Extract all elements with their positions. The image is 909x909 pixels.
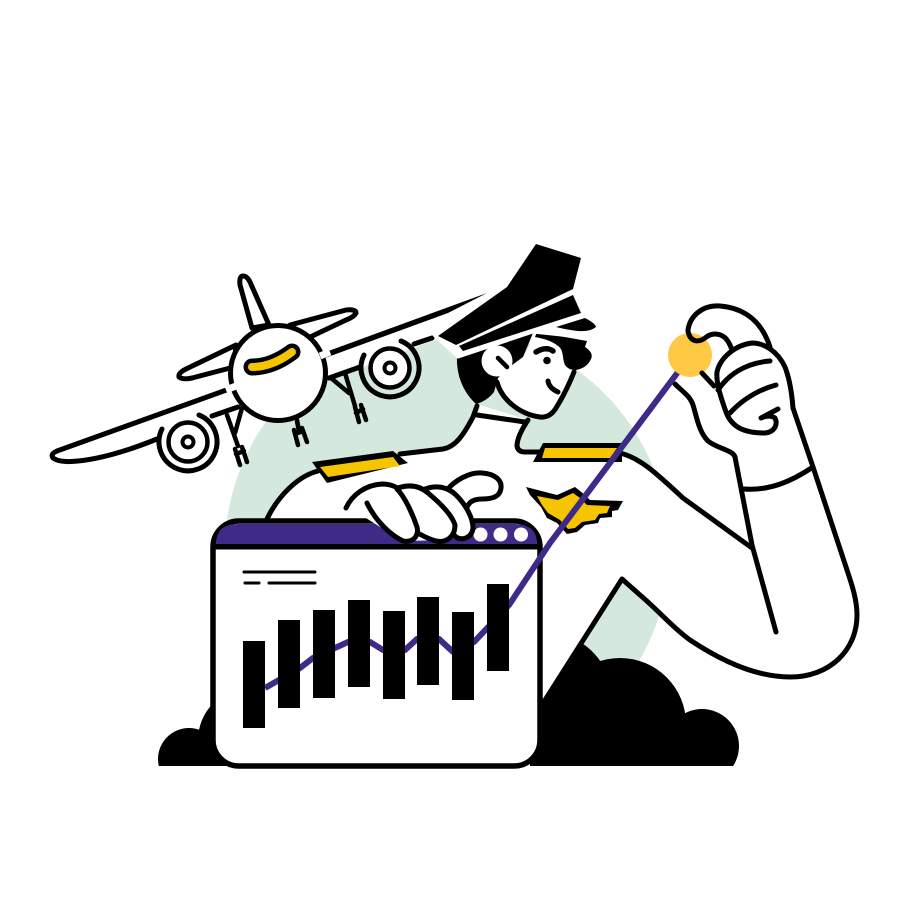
smile: [548, 381, 558, 392]
left wing: [52, 388, 238, 462]
right epaulet: [533, 443, 622, 462]
right engine: [361, 341, 419, 397]
window frame: [213, 521, 540, 766]
hair back: [457, 333, 533, 404]
left epaulet: [312, 451, 408, 483]
left engine: [159, 415, 217, 471]
title bar: [216, 524, 537, 544]
fingertip hook: [688, 306, 770, 347]
bar chart: [243, 584, 509, 728]
cap white backing: [434, 288, 599, 357]
text lines: [244, 572, 315, 583]
green background circle: [227, 340, 659, 661]
cockpit window: [252, 352, 292, 367]
shoulder: [267, 471, 318, 519]
pilot head: [457, 332, 592, 417]
second finger: [398, 486, 455, 541]
wings badge: [526, 487, 623, 534]
left tailplane: [179, 345, 236, 379]
right tailplane: [290, 310, 356, 338]
middle gear strut: [297, 420, 299, 431]
fuselage: [226, 326, 330, 420]
gold coin: [668, 333, 712, 377]
hand on window: [346, 473, 501, 541]
tail fin: [240, 276, 269, 328]
right wing: [322, 293, 487, 380]
first finger: [367, 489, 417, 541]
airplane: [52, 276, 487, 471]
thumb: [447, 473, 501, 510]
cap visor: [556, 318, 596, 331]
pilot body and arm: [267, 305, 855, 708]
black clouds: [158, 644, 739, 766]
inner arm line: [675, 384, 776, 632]
cap band: [459, 295, 581, 351]
raised hand: [668, 306, 793, 433]
eyebrow: [536, 349, 553, 352]
ear: [482, 346, 512, 376]
hair front: [535, 332, 592, 370]
fist: [702, 373, 714, 386]
cuff: [744, 467, 813, 489]
neck line: [477, 415, 525, 422]
browser window with chart: [213, 521, 540, 766]
purple trend line: [265, 372, 678, 688]
pilot cap: [434, 244, 599, 357]
cap crown: [438, 244, 581, 345]
back line: [400, 406, 477, 454]
eye: [543, 357, 551, 364]
collar: [517, 420, 545, 452]
back of hand: [350, 486, 470, 541]
lower body line: [540, 408, 857, 708]
third finger: [423, 487, 473, 539]
window dots: [474, 528, 528, 542]
face: [497, 336, 577, 417]
body outline: [267, 384, 857, 708]
upper arm: [620, 453, 752, 548]
finger lines: [718, 361, 770, 390]
landing gear: [227, 373, 366, 465]
